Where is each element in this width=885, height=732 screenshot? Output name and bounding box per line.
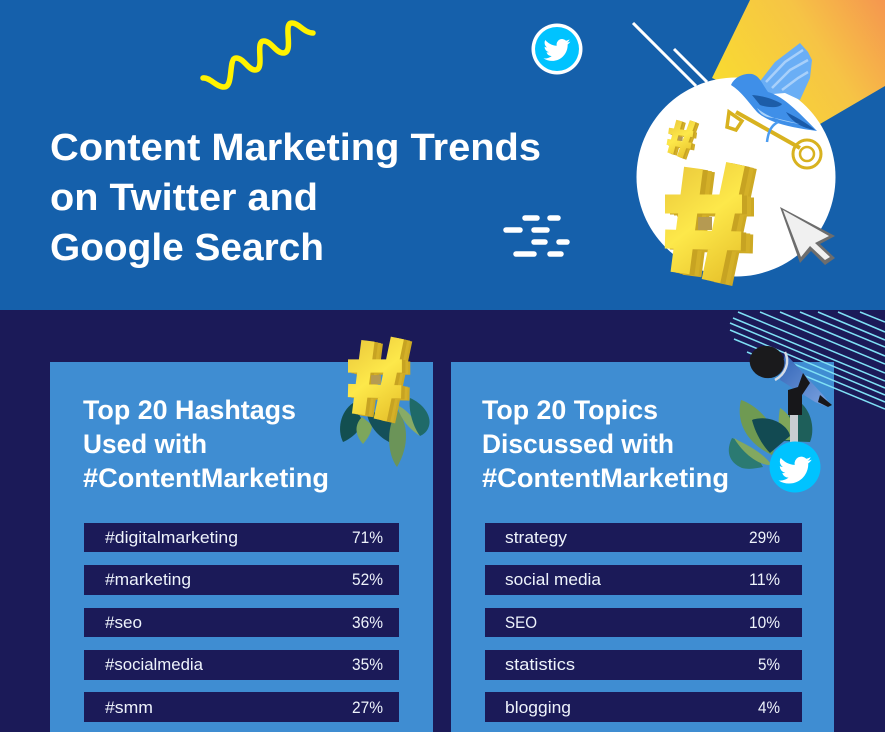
row: smm: 27% (352, 699, 383, 717)
icon: twitter badge in header (532, 24, 582, 74)
title: Content Marketing Trends (50, 127, 541, 169)
icon: pixel cursor arrow (780, 207, 835, 265)
row: blogging (485, 692, 802, 722)
panel heading: Top 20 Hashtags (83, 395, 296, 425)
icon: small gold hash (665, 118, 699, 160)
icon: leaves behind microphone (729, 400, 812, 469)
white diagonal lines (633, 23, 707, 86)
row: marketing: 52% (352, 571, 383, 589)
icon: gold hash on left panel (348, 338, 410, 422)
row: strategy (485, 523, 802, 552)
row: statistics (485, 650, 802, 680)
row: statistics: statistics (505, 656, 575, 674)
row: socialmedia (84, 650, 399, 680)
icon: large gold hash (665, 164, 754, 284)
panel heading: Discussed with (482, 429, 674, 459)
row: strategy: strategy (505, 529, 568, 547)
row: digitalmarketing (84, 523, 399, 552)
header band (0, 0, 885, 310)
white circle (636, 78, 836, 276)
panel heading: Top 20 Topics (482, 395, 658, 425)
row: SEO: 10% (749, 614, 780, 632)
row: blogging: 4% (758, 699, 780, 717)
row: smm (84, 692, 399, 722)
row: social media: 11% (749, 571, 780, 589)
decorative cyan stripes (730, 312, 885, 409)
row: SEO (485, 608, 802, 637)
panel: top topics (451, 362, 834, 732)
row: marketing (84, 565, 399, 595)
panel: top hashtags (50, 362, 433, 732)
title: Google Search (50, 227, 324, 269)
row: digitalmarketing: #digitalmarketing (105, 529, 238, 547)
row: smm: #smm (105, 699, 153, 717)
decorative white dashes (506, 218, 567, 254)
row: SEO: SEO (505, 614, 537, 632)
icon: leaves under left hash (340, 398, 430, 467)
row: social media: social media (505, 571, 602, 589)
row: statistics: 5% (758, 656, 780, 674)
title (50, 127, 541, 269)
lower background (0, 310, 885, 732)
panel heading: Used with (83, 429, 207, 459)
row: social media (485, 565, 802, 595)
row: seo: #seo (105, 614, 142, 632)
row: seo: 36% (352, 614, 383, 632)
row: blogging: blogging (505, 699, 571, 717)
row: seo (84, 608, 399, 637)
icon: blue bird (731, 43, 817, 142)
icon: microphone on stand (745, 341, 832, 444)
panel heading: #ContentMarketing (83, 463, 329, 493)
decorative yellow squiggle (203, 23, 313, 87)
row: strategy: 29% (749, 529, 780, 547)
panel heading (482, 395, 729, 493)
title: on Twitter and (50, 177, 318, 219)
panel heading (83, 395, 329, 493)
panel heading: #ContentMarketing (482, 463, 729, 493)
icon: twitter badge on right panel (770, 442, 820, 492)
row: socialmedia: #socialmedia (105, 656, 204, 674)
row: socialmedia: 35% (352, 656, 383, 674)
yellow-orange light beam (712, 0, 885, 124)
icon: golden key (727, 112, 821, 168)
row: digitalmarketing: 71% (352, 529, 383, 547)
row: marketing: #marketing (105, 571, 191, 589)
